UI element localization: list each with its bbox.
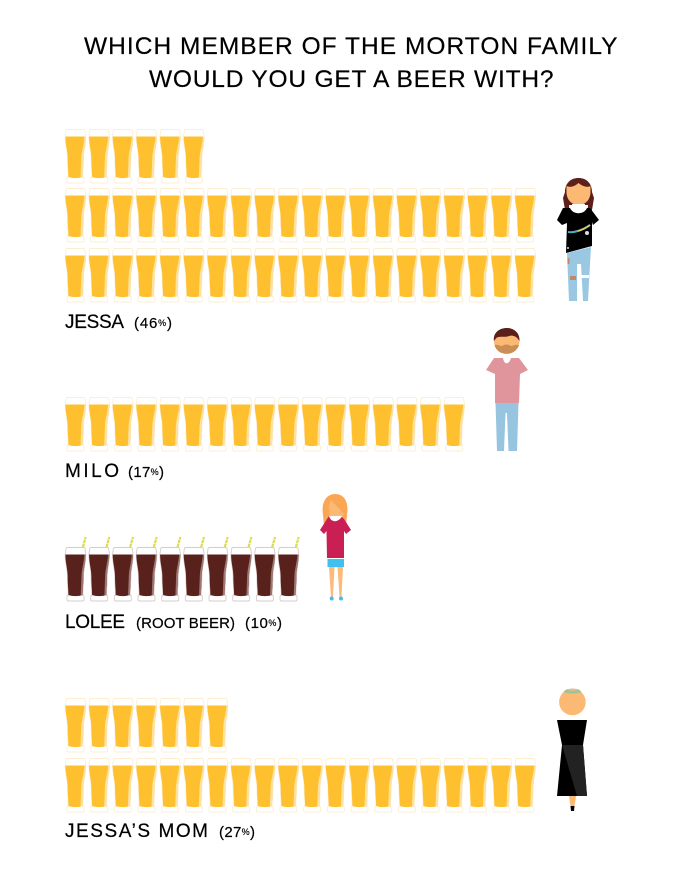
label: Lolee: (ROOT BEER) bbox=[136, 615, 235, 632]
glass rows: Jessa's mom 27% bbox=[65, 698, 535, 812]
label: Jessa: JESSA bbox=[65, 312, 124, 333]
icon: Jessa figure bbox=[557, 178, 599, 301]
label: Jessa's mom: JESSA’S MOM bbox=[65, 821, 208, 842]
label: Milo: (17 bbox=[128, 464, 150, 481]
label: Jessa: % bbox=[158, 318, 166, 328]
icon: Lolee figure bbox=[320, 494, 351, 600]
label: Milo: % bbox=[151, 467, 159, 477]
panel: Jessa bbox=[65, 130, 599, 333]
label: Milo: MILO bbox=[65, 461, 119, 482]
label: Jessa: (46 bbox=[134, 315, 157, 332]
icon: Jessa's mom figure bbox=[557, 688, 587, 811]
label: Lolee: LOLEE bbox=[65, 612, 125, 633]
title: WOULD YOU GET A BEER WITH? bbox=[149, 66, 554, 93]
panel: Milo bbox=[65, 328, 528, 482]
icon: Milo figure bbox=[486, 328, 528, 451]
panel: Jessa's mom bbox=[65, 688, 587, 842]
glass row: Milo 17% bbox=[65, 398, 465, 451]
panel: Lolee bbox=[65, 494, 351, 633]
label: Lolee: % bbox=[268, 618, 276, 628]
title: WHICH MEMBER OF THE MORTON FAMILY bbox=[84, 33, 618, 60]
label: Jessa's mom: ) bbox=[250, 824, 255, 841]
label: Milo bbox=[65, 461, 164, 482]
glass row: Lolee 10% root beer bbox=[65, 537, 299, 601]
label: Lolee: (10 bbox=[245, 615, 268, 632]
label: Lolee bbox=[65, 612, 282, 633]
label: Lolee: ) bbox=[277, 615, 282, 632]
label: Milo: ) bbox=[159, 464, 164, 481]
label: Jessa: ) bbox=[167, 315, 172, 332]
title bbox=[84, 33, 618, 93]
label: Jessa's mom: % bbox=[242, 827, 250, 837]
label: Jessa's mom: (27 bbox=[219, 824, 241, 841]
label: Jessa bbox=[65, 312, 172, 333]
glass rows: Jessa 46% bbox=[65, 130, 535, 302]
